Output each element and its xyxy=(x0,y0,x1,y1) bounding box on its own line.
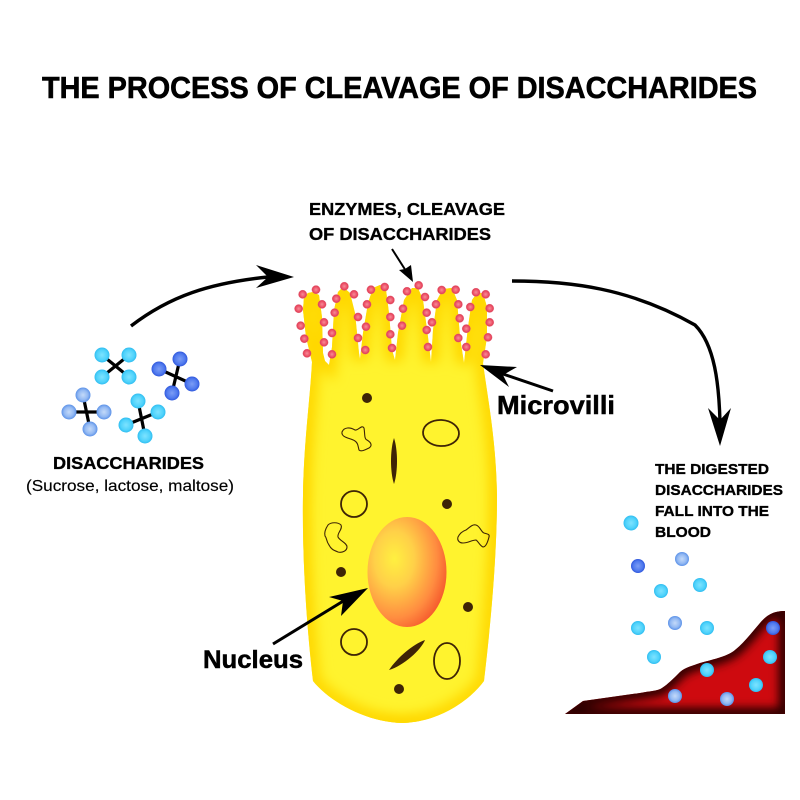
label: enzymes: OF DISACCHARIDES xyxy=(309,224,491,244)
cell body with microvilli xyxy=(302,285,497,723)
arrow: microvilli pointer xyxy=(480,365,553,391)
molecule 4 xyxy=(118,394,166,444)
label: microvilli: Microvilli xyxy=(497,390,615,420)
organelles xyxy=(325,419,489,679)
vesicle circle left xyxy=(341,491,367,517)
vesicle ellipse upper right xyxy=(422,419,460,447)
monosaccharides falling into blood xyxy=(624,516,780,706)
label: disaccharides: (Sucrose, lactose, maltose) xyxy=(26,478,234,495)
label: digested disaccharides: BLOOD xyxy=(655,524,711,541)
vesicle ellipse lower right xyxy=(434,643,460,679)
irregular organelle left xyxy=(325,523,347,552)
irregular organelle upper xyxy=(342,427,371,451)
arrow: disaccharides to cell xyxy=(131,265,294,326)
label: enzymes: ENZYMES, CLEAVAGE xyxy=(309,199,505,219)
arrow: nucleus pointer xyxy=(273,588,368,644)
enzymes on microvilli xyxy=(294,281,494,358)
arrow: cell to blood xyxy=(512,281,731,446)
vesicle circle lower left xyxy=(341,629,367,655)
molecule 1 xyxy=(94,348,136,384)
nucleus xyxy=(368,517,446,627)
molecule 2 xyxy=(152,352,200,400)
label: nucleus: Nucleus xyxy=(203,646,303,674)
label: digested disaccharides xyxy=(655,461,783,541)
label: digested disaccharides: THE DIGESTED xyxy=(655,461,769,478)
molecule 3 xyxy=(62,388,112,436)
label: digested disaccharides: FALL INTO THE xyxy=(655,503,769,520)
label: disaccharides: DISACCHARIDES xyxy=(53,453,204,473)
label: enzymes xyxy=(309,199,505,244)
irregular organelle right xyxy=(458,525,489,547)
molecules: disaccharides xyxy=(62,348,200,444)
dark granules xyxy=(336,393,473,694)
title: THE PROCESS OF CLEAVAGE OF DISACCHARIDES xyxy=(42,70,757,105)
label: digested disaccharides: DISACCHARIDES xyxy=(655,482,783,499)
label: disaccharides xyxy=(26,453,234,495)
blood vessel xyxy=(565,611,785,714)
arrow: enzymes pointer xyxy=(392,249,413,282)
